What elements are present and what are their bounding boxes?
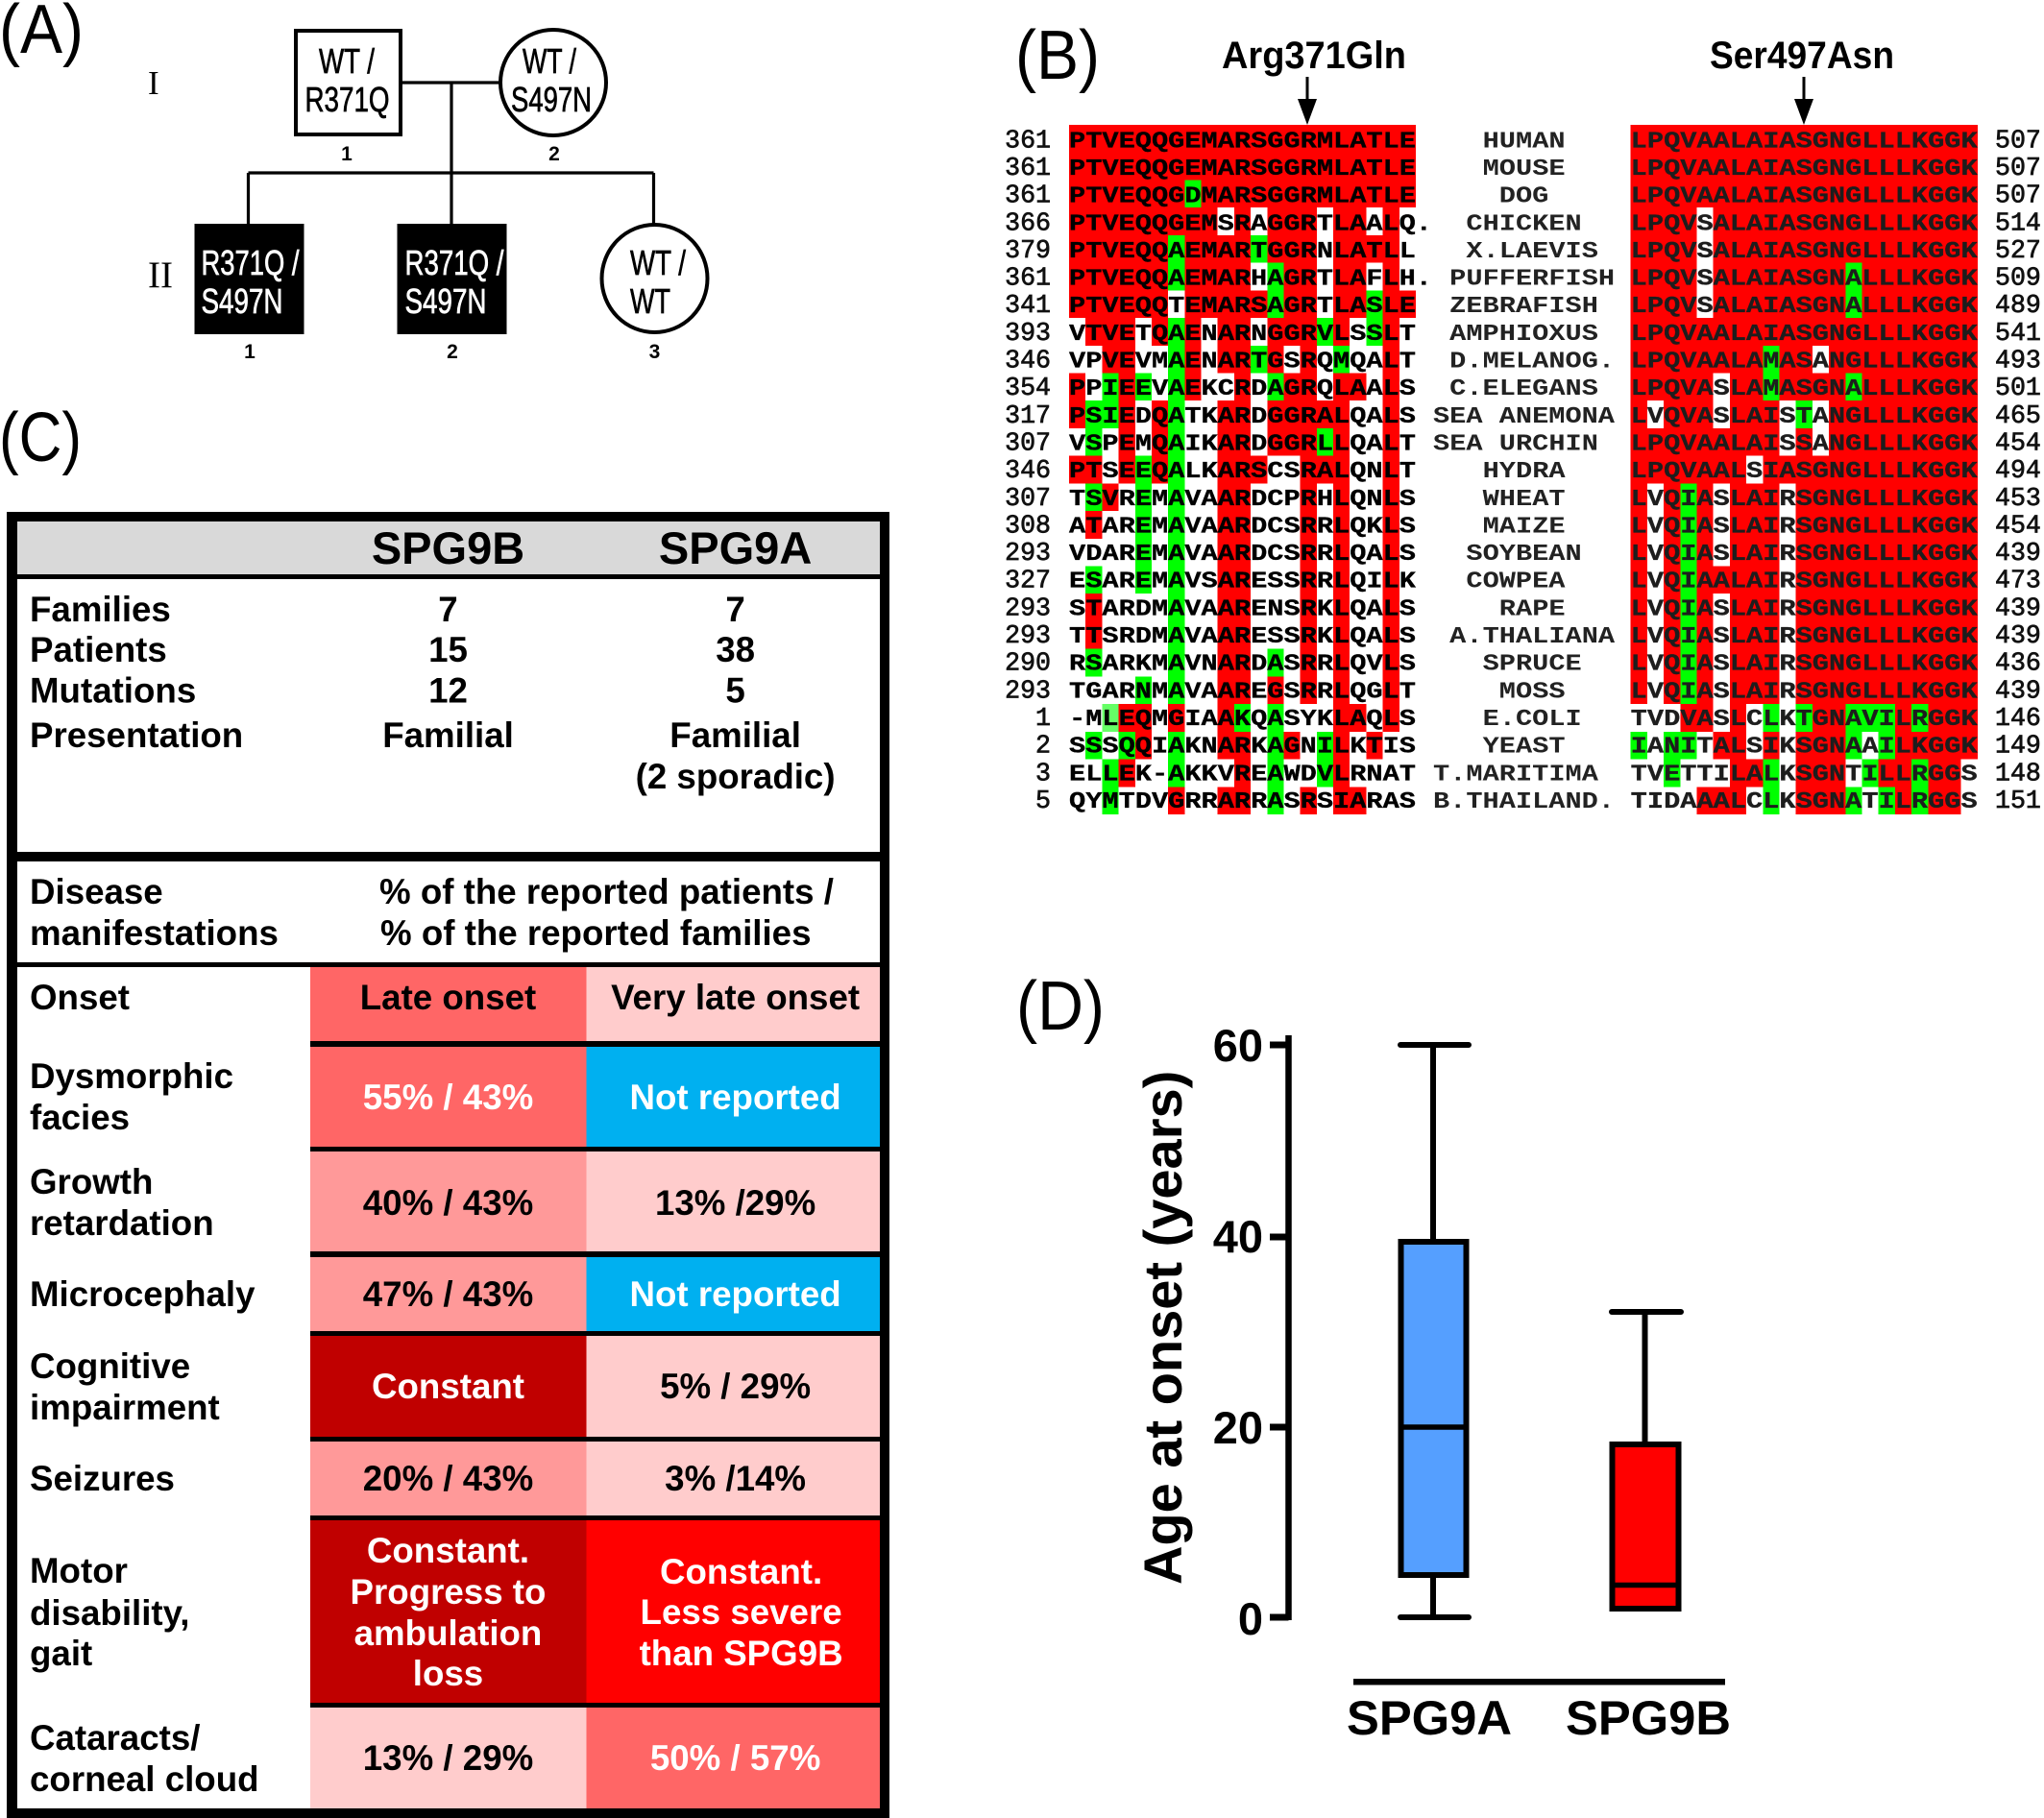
summary section: Families [30, 590, 171, 629]
row: cataracts: 13% / 29% [363, 1738, 533, 1778]
species names: D.MELANOG. [1449, 350, 1615, 375]
row: motor disability: ambulation [354, 1613, 542, 1653]
right residue numbers: 439 [1995, 539, 2041, 568]
disease manifestations header: % of the reported patients / [379, 872, 834, 911]
left residue numbers: 308 [1005, 511, 1051, 540]
individual II-2 affected: R371Q / [405, 243, 503, 282]
right block sequences: LVQIASLAIRSGNGLLLKGGK [1631, 624, 1978, 650]
box SPG9A [1400, 1045, 1469, 1617]
table header row: SPG9A [659, 522, 812, 573]
left block sequences: PTVEQQGEMARSGGRMLATLE [1069, 157, 1416, 182]
table header row: SPG9B [372, 522, 524, 573]
summary section: Familial [382, 715, 514, 755]
left residue numbers: 293 [1005, 621, 1051, 650]
row: growth retardation [310, 1151, 880, 1251]
summary section: Familial [669, 715, 801, 755]
right residue numbers: 527 [1995, 236, 2041, 265]
row: cataracts: 50% / 57% [650, 1738, 820, 1778]
left block sequences [1069, 129, 1432, 815]
individual I-1 father: 1 [341, 143, 353, 165]
summary section: 12 [428, 670, 468, 711]
summary section: Presentation [30, 715, 243, 755]
right residue numbers: 439 [1995, 594, 2041, 622]
left residue numbers: 354 [1005, 374, 1051, 402]
right block sequences: LPQVAALAMASANGLLLKGGK [1631, 350, 1978, 375]
row: onset: Late onset [360, 978, 536, 1017]
right block sequences: LPQVASLAMASGNALLLKGGK [1631, 376, 1978, 402]
left residue numbers: 366 [1005, 208, 1051, 237]
row labels column [17, 967, 310, 1808]
individual II-1 affected: R371Q / [202, 243, 300, 282]
mutation label Ser497Asn: Ser497Asn [1710, 35, 1894, 77]
left block sequences: TGARNMAVAAREGSRRLQGLT [1069, 679, 1416, 705]
right residue numbers: 146 [1995, 704, 2041, 733]
panel D: box plot [1016, 968, 1731, 1745]
right block sequences: LPQVAALAIASGNGLLLKGGK [1631, 184, 1978, 210]
row: seizures: 3% /14% [665, 1459, 806, 1498]
right residue numbers: 489 [1995, 291, 2041, 320]
left block sequences: VTVETQAENARNGGRVLSSLT [1069, 322, 1416, 348]
left block sequences: PTVEQQTEMARSAGRTLASLE [1069, 294, 1416, 320]
species names: SOYBEAN [1466, 542, 1582, 568]
left residue numbers: 361 [1005, 126, 1051, 155]
right block sequences: IANITALSIKSGNAAILKGGK [1631, 735, 1978, 761]
row: motor disability: loss [413, 1654, 483, 1693]
species names: COWPEA [1466, 570, 1566, 595]
species names: MOSS [1499, 679, 1566, 705]
right residue numbers: 454 [1995, 428, 2041, 457]
table header row [17, 521, 880, 574]
x axis label SPG9A: SPG9A [1347, 1691, 1512, 1745]
right block sequences: LPQVAALAIASGNGLLLKGGK [1631, 129, 1978, 155]
summary section: 7 [725, 590, 745, 629]
row labels column: disability, [30, 1593, 190, 1633]
right residue numbers: 507 [1995, 182, 2041, 210]
individual II-3 unaffected: WT / [630, 243, 686, 282]
row: microcephaly: 47% / 43% [363, 1274, 533, 1314]
arrow to residue 371 [1298, 77, 1317, 125]
row: growth retardation: 13% /29% [655, 1183, 815, 1223]
individual I-1 father: WT / [319, 41, 375, 81]
row: dysmorphic facies [310, 1047, 880, 1147]
left residue numbers: 5 [1035, 787, 1051, 815]
right block sequences: LVQVASLAISTANGLLLKGGK [1631, 404, 1978, 430]
right block sequences: LPQVSALAIASGNGLLLKGGK [1631, 211, 1978, 237]
row labels column: Microcephaly [30, 1274, 256, 1314]
row labels column: impairment [30, 1388, 220, 1427]
left residue numbers: 361 [1005, 182, 1051, 210]
species names: CHICKEN [1466, 211, 1582, 237]
right block sequences [1631, 129, 1978, 815]
right residue numbers: 151 [1995, 787, 2041, 815]
row: motor disability: than SPG9B [640, 1634, 843, 1673]
right residue numbers: 436 [1995, 649, 2041, 678]
species names: HUMAN [1483, 129, 1566, 155]
individual II-2 affected: S497N [405, 281, 486, 321]
row: microcephaly [310, 1257, 880, 1331]
left residue numbers: 317 [1005, 401, 1051, 430]
left residue numbers: 2 [1035, 732, 1051, 761]
species names: DOG [1499, 184, 1548, 210]
left block sequences: -MLEQMGIAAKQASYKLAQLS [1069, 707, 1416, 733]
table frame [7, 512, 889, 1818]
individual II-2 affected: 2 [447, 341, 458, 363]
species names: SEA ANEMONA [1433, 404, 1616, 430]
right residue numbers: 473 [1995, 567, 2041, 595]
right residue numbers: 514 [1995, 208, 2041, 237]
y axis tick labels [1213, 1020, 1263, 1644]
left block sequences: PTVEQQAEMARHAGRTLAFLH. [1069, 267, 1432, 293]
row labels column: Dysmorphic [30, 1056, 233, 1096]
left residue numbers: 393 [1005, 319, 1051, 348]
individual II-1 affected: 1 [244, 341, 256, 363]
y axis tick labels: 20 [1213, 1402, 1263, 1453]
left block sequences: SSSQQIAKNARKAGNILKTIS [1069, 735, 1416, 761]
row: onset [310, 967, 880, 1041]
row: dysmorphic facies: 55% / 43% [363, 1078, 533, 1117]
row: motor disability [310, 1520, 880, 1703]
y axis tick labels: 0 [1238, 1593, 1263, 1644]
summary section: 7 [438, 590, 458, 629]
row: microcephaly: Not reported [630, 1274, 841, 1314]
right residue numbers [1995, 126, 2041, 815]
individual II-3 unaffected: 3 [649, 341, 660, 363]
individual I-2 mother: S497N [511, 80, 592, 119]
left block sequences: STARDMAVAARENSRKLQALS [1069, 596, 1416, 622]
species names: T.MARITIMA [1433, 762, 1599, 788]
right block sequences: LVQIASLAIRSGNGLLLKGGK [1631, 652, 1978, 678]
right residue numbers: 493 [1995, 346, 2041, 375]
row: cognitive impairment: Constant [372, 1367, 524, 1406]
row: cataracts [310, 1708, 880, 1808]
row: cognitive impairment: 5% / 29% [660, 1367, 811, 1406]
species names: MOUSE [1483, 157, 1566, 182]
left block sequences: TSVREMAVAARDCPRHLQNLS [1069, 487, 1416, 513]
pedigree connecting lines [248, 83, 653, 224]
generation label I: I [148, 64, 159, 102]
right block sequences: LPQVSALAIASGNGLLLKGGK [1631, 239, 1978, 265]
left block sequences: PTSEEQALKARSCSRALQNLT [1069, 459, 1416, 485]
left residue numbers: 341 [1005, 291, 1051, 320]
summary section: (2 sporadic) [636, 757, 836, 796]
summary section: 15 [428, 630, 468, 669]
left block sequences: VSPEMQAIKARDGGRLLQALT [1069, 432, 1416, 457]
individual I-2 mother: 2 [548, 143, 560, 165]
left residue numbers: 379 [1005, 236, 1051, 265]
row: motor disability: Progress to [351, 1572, 546, 1612]
right residue numbers: 465 [1995, 401, 2041, 430]
panel C: comparison table [7, 512, 889, 1818]
right residue numbers: 507 [1995, 154, 2041, 182]
right residue numbers: 453 [1995, 484, 2041, 513]
right residue numbers: 454 [1995, 511, 2041, 540]
right residue numbers: 148 [1995, 759, 2041, 788]
species names: SPRUCE [1483, 652, 1582, 678]
individual I-1 father [296, 31, 401, 165]
species names: A.THALIANA [1449, 624, 1616, 650]
row labels column: Seizures [30, 1459, 175, 1498]
right block sequences: LPQVSALAIASGNALLLKGGK [1631, 294, 1978, 320]
left block sequences: TTSRDMAVAARESSRKLQALS [1069, 624, 1416, 650]
right residue numbers: 439 [1995, 676, 2041, 705]
summary section: Mutations [30, 670, 196, 711]
row: seizures: 20% / 43% [363, 1459, 533, 1498]
left block sequences: QYMTDVGRRARRASRSIARAS [1069, 789, 1416, 815]
right block sequences: LPQVAALAIASGNGLLLKGGK [1631, 322, 1978, 348]
disease manifestations header [17, 861, 880, 962]
disease manifestations header: % of the reported families [380, 913, 811, 953]
species names: B.THAILAND. [1433, 789, 1615, 815]
row: dysmorphic facies: Not reported [630, 1078, 841, 1117]
y axis tick labels: 60 [1213, 1020, 1263, 1071]
left residue numbers: 1 [1035, 704, 1051, 733]
right block sequences: TVETTILALKSGNTILLRGGS [1631, 762, 1978, 788]
arrow to residue 497 [1794, 77, 1813, 125]
left residue numbers: 361 [1005, 154, 1051, 182]
summary section: 5 [725, 670, 745, 711]
row: motor disability: Less severe [641, 1592, 842, 1632]
left block conservation shading [1069, 138, 1416, 801]
species names: SEA URCHIN [1433, 432, 1598, 457]
left residue numbers: 346 [1005, 456, 1051, 485]
row labels column: gait [30, 1634, 92, 1673]
left block sequences: RSARKMAVNARDASRRLQVLS [1069, 652, 1416, 678]
left residue numbers: 293 [1005, 594, 1051, 622]
individual I-1 father: R371Q [305, 80, 390, 119]
row: growth retardation: 40% / 43% [363, 1183, 533, 1223]
species names [1433, 129, 1616, 815]
right block sequences: LVQIASLAIRSGNGLLLKGGK [1631, 514, 1978, 540]
left block sequences: ESAREMAVSARESSRRLQILK [1069, 570, 1417, 595]
left block sequences: PTVEQQAEMARTGGRNLATLL [1069, 239, 1416, 265]
row labels column: Growth [30, 1162, 153, 1201]
species names: MAIZE [1483, 514, 1566, 540]
panel C label: (C) [0, 400, 82, 476]
left block sequences: PTVEQQGEMSRAGGRTLAALQ. [1069, 211, 1432, 237]
left residue numbers [1005, 126, 1051, 815]
right block sequences: LVQIAALAIRSGNGLLLKGGK [1631, 570, 1978, 595]
species names: WHEAT [1483, 487, 1566, 513]
species names: C.ELEGANS [1449, 376, 1598, 402]
box SPG9B [1612, 1312, 1681, 1609]
left residue numbers: 3 [1035, 759, 1051, 788]
summary section: Patients [30, 630, 167, 669]
row: motor disability: Constant. [367, 1531, 529, 1570]
individual II-2 affected [398, 224, 507, 363]
right block sequences: LVQIASLAIRSGNGLLLKGGK [1631, 596, 1978, 622]
disease manifestations header: Disease [30, 872, 163, 911]
right block sequences: LVQIASLAIRSGNGLLLKGGK [1631, 679, 1978, 705]
left block sequences: ELLEK-AKKVREAWDVLRNAT [1069, 762, 1416, 788]
individual II-3 unaffected: WT [630, 281, 670, 321]
left residue numbers: 346 [1005, 346, 1051, 375]
species names: X.LAEVIS [1466, 239, 1598, 265]
left residue numbers: 293 [1005, 676, 1051, 705]
row labels column: Cataracts/ [30, 1718, 200, 1757]
left block sequences: VPVEVMAENARTGSRQMQALT [1069, 350, 1416, 375]
right residue numbers: 149 [1995, 732, 2041, 761]
right residue numbers: 439 [1995, 621, 2041, 650]
summary section [17, 579, 880, 852]
right block sequences: TVDVASLCLKTGNAVILRGGK [1631, 707, 1978, 733]
left block sequences: PSIEDQATKARDGGRALQALS [1069, 404, 1416, 430]
right block sequences: LVQIASLAIRSGNGLLLKGGK [1631, 487, 1978, 513]
y axis tick labels: 40 [1213, 1211, 1263, 1262]
panel label D: (D) [1016, 968, 1105, 1045]
right block sequences: LPQVAALSIASGNGLLLKGGK [1631, 459, 1978, 485]
species names: AMPHIOXUS [1449, 322, 1598, 348]
right residue numbers: 507 [1995, 126, 2041, 155]
row labels column: facies [30, 1098, 130, 1137]
right residue numbers: 541 [1995, 319, 2041, 348]
right residue numbers: 494 [1995, 456, 2041, 485]
disease manifestations header: manifestations [30, 913, 279, 953]
species names: E.COLI [1483, 707, 1582, 733]
y axis with ticks [1270, 1035, 1289, 1620]
panel A: pedigree [0, 0, 707, 363]
y axis title: Age at onset (years) [1132, 1071, 1193, 1585]
left residue numbers: 327 [1005, 567, 1051, 595]
left block sequences: ATAREMAVAARDCSRRLQKLS [1069, 514, 1416, 540]
individual II-1 affected: S497N [202, 281, 282, 321]
species names: PUFFERFISH [1449, 267, 1615, 293]
x axis label SPG9B: SPG9B [1566, 1691, 1731, 1745]
left residue numbers: 293 [1005, 539, 1051, 568]
row labels column: Motor [30, 1551, 128, 1590]
species names: ZEBRAFISH [1449, 294, 1598, 320]
row labels column: corneal cloud [30, 1759, 259, 1799]
right block sequences: LPQVSALAIASGNALLLKGGK [1631, 267, 1978, 293]
right block sequences: LPQVAALAIASGNGLLLKGGK [1631, 157, 1978, 182]
panel label B: (B) [1015, 17, 1100, 94]
individual II-1 affected [194, 224, 304, 363]
left block sequences: VDAREMAVAARDCSRRLQALS [1069, 542, 1416, 568]
right residue numbers: 501 [1995, 374, 2041, 402]
left block sequences: PTVEQQGEMARSGGRMLATLE [1069, 129, 1416, 155]
left residue numbers: 290 [1005, 649, 1051, 678]
right block conservation shading [1631, 138, 1978, 801]
row labels column: Cognitive [30, 1346, 190, 1386]
right block sequences: LVQIASLAIRSGNGLLLKGGK [1631, 542, 1978, 568]
row labels column: retardation [30, 1203, 214, 1243]
species names: YEAST [1483, 735, 1566, 761]
row: motor disability: Constant. [660, 1552, 822, 1591]
left block sequences: PPIEEVAEKCRDAGRQLAALS [1069, 376, 1416, 402]
left residue numbers: 307 [1005, 428, 1051, 457]
row: cognitive impairment [310, 1336, 880, 1437]
row: seizures [310, 1442, 880, 1515]
species names: RAPE [1499, 596, 1566, 622]
species names: HYDRA [1483, 459, 1566, 485]
panel B: sequence alignment [1005, 17, 2041, 815]
left block sequences: PTVEQQGDMARSGGRMLATLE [1069, 184, 1416, 210]
generation label II: II [148, 255, 173, 296]
individual II-3 unaffected [601, 225, 707, 363]
left residue numbers: 361 [1005, 264, 1051, 293]
right block sequences: LPQVAALAISSANGLLLKGGK [1631, 432, 1978, 457]
right block sequences: TIDAAALCLKSGNATILRGGS [1631, 789, 1978, 815]
left residue numbers: 307 [1005, 484, 1051, 513]
individual I-2 mother: WT / [523, 41, 576, 81]
row: onset: Very late onset [611, 978, 860, 1017]
x axis line [1353, 1679, 1725, 1685]
summary section: 38 [716, 630, 755, 669]
individual I-2 mother [500, 30, 606, 165]
mutation label Arg371Gln: Arg371Gln [1222, 35, 1406, 77]
right residue numbers: 509 [1995, 264, 2041, 293]
row labels column: Onset [30, 978, 130, 1017]
